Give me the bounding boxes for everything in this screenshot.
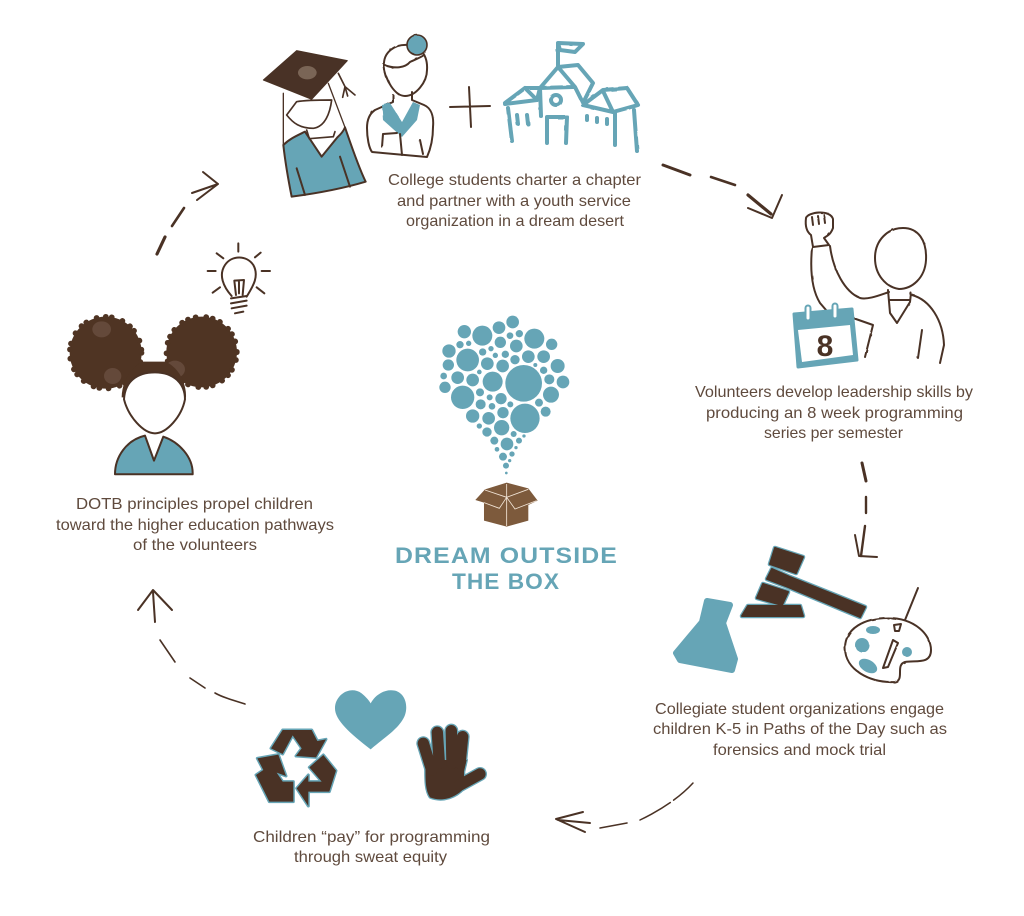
icon: nurse xyxy=(367,35,433,157)
panel: step 2 volunteers xyxy=(695,212,973,442)
icon: open cardboard box xyxy=(475,483,538,527)
text: step 1 caption: College students charter a chapter xyxy=(388,172,642,189)
center logo xyxy=(395,316,618,594)
text: step 4 caption: Children “pay” for programming xyxy=(253,829,490,846)
text: step 4 caption xyxy=(253,829,490,866)
text: step 2 caption xyxy=(695,384,973,442)
icon: flask xyxy=(676,601,735,670)
icon: bubbles balloon xyxy=(439,316,569,474)
text: step 5 caption: DOTB principles propel children xyxy=(76,496,313,513)
icon: paint palette xyxy=(845,588,931,682)
heading: Dream Outside The Box: DREAM OUTSIDE xyxy=(395,543,618,568)
arrow: step 2 to step 3 xyxy=(855,463,877,557)
text: step 5 caption: toward the higher education pathways xyxy=(56,517,334,534)
icon: recycling arrows xyxy=(256,730,336,806)
text: step 2 caption: series per semester xyxy=(764,425,904,442)
icon: light bulb xyxy=(208,243,270,313)
icon: plus xyxy=(450,87,490,127)
arrow: step 5 to step 1 xyxy=(157,172,218,254)
icon: calendar with number 8 xyxy=(794,306,857,367)
text: step 3 caption: children K-5 in Paths of the Day such as xyxy=(653,721,947,738)
text: step 1 caption: and partner with a youth service xyxy=(397,193,631,210)
arrow: step 3 to step 4 xyxy=(556,783,693,832)
text: step 1 caption: organization in a dream desert xyxy=(406,213,625,230)
text: step 2 caption: Volunteers develop leadership skills by xyxy=(695,384,973,401)
text: step 3 caption: forensics and mock trial xyxy=(713,742,886,759)
text: step 5 caption xyxy=(56,496,334,554)
text: step 2 caption: producing an 8 week programming xyxy=(706,405,963,422)
panel: step 3 student organizations xyxy=(653,548,947,759)
panel: step 4 sweat equity xyxy=(253,690,490,866)
text: step 5 caption: of the volunteers xyxy=(133,537,257,554)
icon: gavel xyxy=(742,548,865,617)
panel: step 5 children toward higher education xyxy=(56,243,334,554)
heading: Dream Outside The Box xyxy=(395,543,618,594)
icon: calendar with number 8: 8 xyxy=(817,330,833,363)
icon: child with afro puffs xyxy=(70,317,237,474)
icon: hand xyxy=(423,731,480,799)
icon: volunteer with raised fist xyxy=(806,212,944,363)
icon: school building xyxy=(505,43,638,151)
icon: graduate xyxy=(263,51,366,197)
text: step 3 caption xyxy=(653,701,947,759)
text: step 1 caption xyxy=(388,172,642,230)
heading: Dream Outside The Box: THE BOX xyxy=(452,569,560,594)
panel: step 1 college students xyxy=(263,35,642,230)
text: step 4 caption: through sweat equity xyxy=(294,849,447,866)
arrow: step 4 to step 5 xyxy=(138,590,245,704)
icon: heart xyxy=(335,690,406,749)
arrow: step 1 to step 2 xyxy=(663,165,782,218)
text: step 3 caption: Collegiate student organizations engage xyxy=(655,701,944,718)
